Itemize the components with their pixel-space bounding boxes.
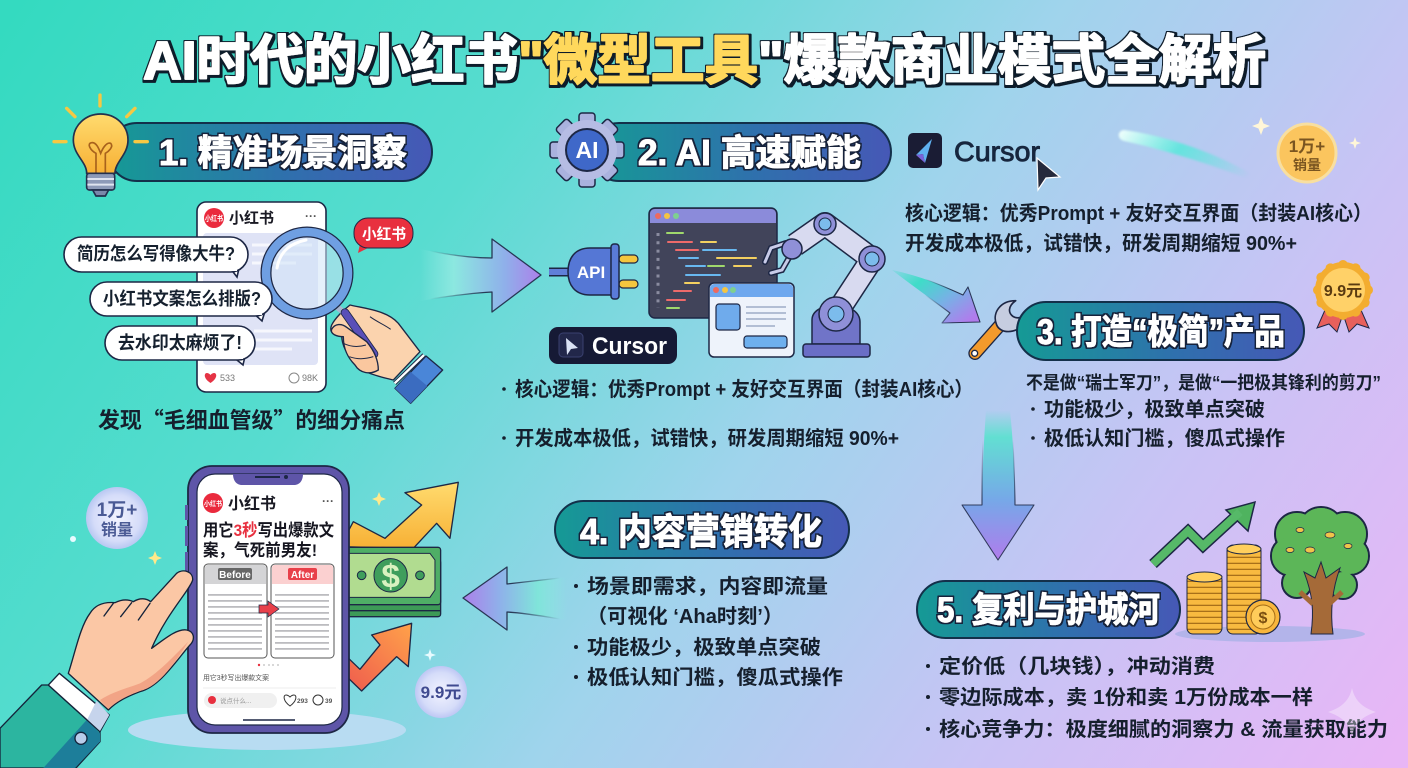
core logic text top right [905, 201, 1372, 255]
icon: rising arrows and cash: $ [381, 558, 400, 595]
icon: money tree [1271, 507, 1369, 634]
speech bubble: copywriting [90, 282, 272, 321]
panel: step 3 minimal product [972, 260, 1381, 450]
speech bubble: copywriting: 小红书文案怎么排版? [103, 288, 261, 309]
speech bubble: resume: 简历怎么写得像大牛? [77, 243, 235, 264]
social post card: 533 [220, 373, 235, 383]
panel: step 5 compounding and moat [917, 502, 1388, 741]
social post card: 98K [302, 373, 318, 383]
step 2 bullet list [502, 377, 973, 450]
step 3 heading pill [1017, 302, 1304, 360]
decoration: large faint sparkle [1328, 688, 1376, 736]
icon: API plug: API [577, 263, 605, 282]
icon: API plug [549, 244, 638, 299]
price orb [415, 666, 467, 718]
sales orb: 1万+ [97, 500, 137, 521]
phone mockup: 说点什么... [220, 696, 252, 705]
phone mockup: 39 [325, 698, 333, 705]
phone mockup: 293 [297, 698, 308, 705]
red brand bubble [354, 218, 413, 253]
step 5 bullet list: 定价低（几块钱），冲动消费 [939, 654, 1215, 678]
phone mockup: 案，气死前男友! [203, 540, 317, 560]
speech bubble: resume [64, 237, 248, 277]
social post card: ··· [305, 209, 317, 223]
step 3 text block: 不是做“瑞士军刀”，是做“一把极其锋利的剪刀” [1026, 373, 1381, 393]
step 4 bullet list: （可视化 ‘Aha时刻’） [587, 605, 783, 628]
arrow: step 3 to step 5 [962, 410, 1034, 560]
decoration: comet [1119, 130, 1272, 188]
sales orb [86, 487, 148, 549]
icon: light bulb [54, 95, 147, 196]
step 4 bullet list: 场景即需求，内容即流量 [587, 574, 828, 598]
icon: AI gear: AI [576, 137, 598, 163]
phone mockup: 用它3秒写出爆款文 [203, 520, 334, 540]
icon: robot arm [765, 213, 885, 357]
speech bubble: watermark: 去水印太麻烦了! [118, 333, 242, 353]
step 3 heading pill: 3. 打造“极简”产品 [1037, 313, 1285, 352]
phone mockup: 用它3秒写出爆款文案 [203, 673, 269, 682]
icon: wrench [972, 301, 1027, 356]
sales orb: 销量 [101, 521, 133, 539]
icon: AI gear [550, 113, 624, 187]
step 4 bullet list [574, 574, 843, 689]
Cursor badge [549, 327, 677, 364]
phone mockup: After [291, 570, 314, 581]
step 5 bullet list: 核心竞争力：极度细腻的洞察力 & 流量获取能力 [939, 717, 1388, 741]
code editor window [649, 208, 777, 318]
step 5 bullet list [926, 654, 1388, 741]
speech bubble: watermark [105, 326, 255, 365]
browser UI window [709, 283, 794, 357]
core logic text top right: 核心逻辑：优秀Prompt + 友好交互界面（封装AI核心） [905, 201, 1372, 225]
social post card: 小红书 [205, 213, 223, 223]
sparkles near phone [70, 492, 436, 661]
phone mockup: Before [219, 570, 251, 581]
step 1 heading pill [108, 123, 432, 181]
phone mockup: 小红书 [228, 494, 276, 513]
step 4 bullet list: 极低认知门槛，傻瓜式操作 [587, 666, 843, 689]
magnifier ring [266, 232, 348, 314]
panel: step 2 AI empowerment [502, 113, 1372, 450]
arrow: step 2 to step 3 [892, 270, 980, 323]
Cursor logo top: Cursor [954, 136, 1040, 167]
phone mockup: ··· [322, 494, 334, 508]
step 2 bullet list: 开发成本极低，试错快，研发周期缩短 90%+ [515, 426, 899, 450]
panel: step 4 content marketing [0, 466, 849, 768]
icon: mouse pointer [1037, 158, 1060, 190]
step 1 heading pill: 1. 精准场景洞察 [159, 132, 407, 173]
price medal: 9.9元 [1324, 283, 1362, 300]
ground shadow [1175, 626, 1365, 642]
sparkles top right [1252, 117, 1361, 149]
phone shadow ellipse [128, 710, 406, 750]
phone mockup [185, 466, 349, 733]
price medal [1313, 260, 1373, 332]
step 4 heading pill [555, 501, 849, 558]
arrow: step 4 to phone [463, 567, 567, 630]
icon: growth arrow [1153, 502, 1255, 564]
step 5 bullet list: 零边际成本，卖 1份和卖 1万份成本一样 [939, 685, 1313, 709]
step 5 heading pill: 5. 复利与护城河 [937, 591, 1160, 630]
step 4 heading pill: 4. 内容营销转化 [580, 511, 822, 552]
sold badge gold: 1万+ [1289, 137, 1325, 156]
Cursor badge: Cursor [592, 333, 667, 360]
step 5 heading pill [917, 581, 1180, 638]
sold badge gold [1278, 124, 1336, 182]
step 2 bullet list: 核心逻辑：优秀Prompt + 友好交互界面（封装AI核心） [515, 377, 973, 401]
Cursor logo top [908, 133, 1040, 168]
step 2 heading pill: 2. AI 高速赋能 [638, 132, 861, 173]
social post card [197, 202, 326, 392]
icon: pointing hand [0, 571, 193, 768]
title: AI时代的小红书"微型工具"爆款商业模式全解析 [143, 31, 1266, 91]
icon: coin stacks [1187, 544, 1280, 634]
step 3 text block: 极低认知门槛，傻瓜式操作 [1044, 427, 1285, 450]
step 1 caption: 发现“毛细血管级”的细分痛点 [98, 403, 405, 435]
core logic text top right: 开发成本极低，试错快，研发周期缩短 90%+ [905, 231, 1297, 255]
icon: rising arrows and cash [340, 482, 458, 691]
step 3 text block: 功能极少，极致单点突破 [1044, 397, 1265, 421]
icon: hand with magnifier [266, 232, 443, 403]
icon: coin stacks: $ [1259, 610, 1268, 627]
step 3 text block [1026, 373, 1381, 450]
sold badge gold: 销量 [1293, 157, 1321, 173]
step 4 bullet list: 功能极少，极致单点突破 [587, 635, 821, 659]
step 2 heading pill [590, 123, 891, 181]
red brand bubble: 小红书 [362, 225, 406, 243]
phone mockup: 小红书 [204, 499, 222, 508]
social post card: 小红书 [229, 209, 274, 227]
price orb: 9.9元 [421, 683, 461, 702]
hand holding handle [331, 305, 443, 403]
panel: step 1 scene insight [54, 95, 443, 435]
arrow: step 1 to step 2 [420, 239, 541, 312]
